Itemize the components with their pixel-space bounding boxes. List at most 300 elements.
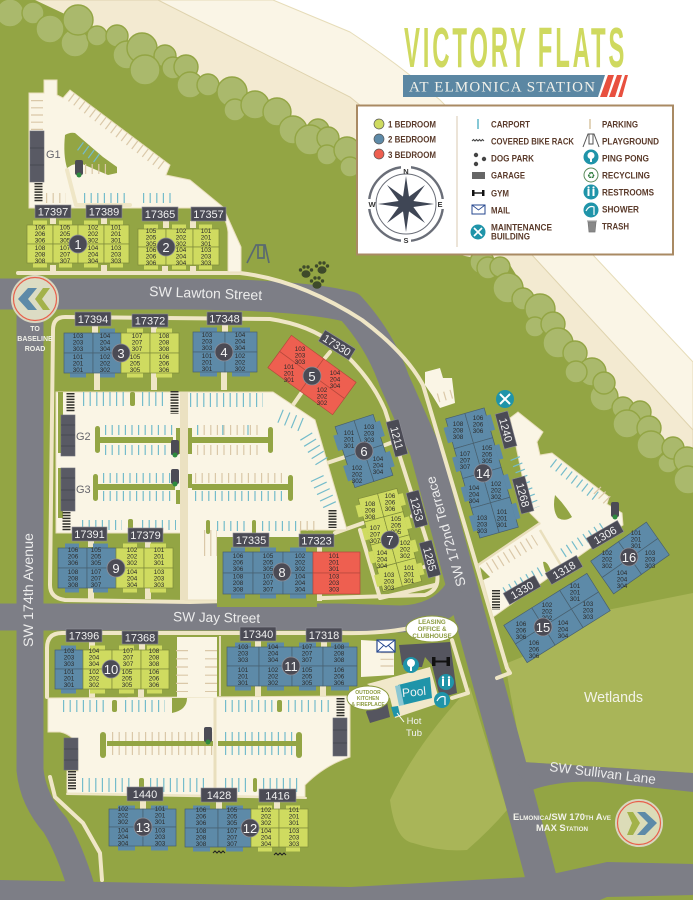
parking lot G1 [29, 80, 241, 272]
legend: compass rose [365, 163, 447, 245]
building 1: 202 [88, 231, 99, 238]
building 4: 301 [202, 366, 213, 373]
building 12: 201 [289, 814, 300, 820]
building 11: 201 [238, 674, 249, 680]
building 14: 201 [497, 516, 508, 522]
building 11: 105 [302, 667, 313, 674]
building 1: 102 [88, 224, 99, 232]
legend: icons column two: ♻ [587, 172, 595, 182]
wetlands label: Wetlands [584, 690, 643, 706]
building 16: 203 [645, 556, 656, 564]
building 7: 103 [384, 572, 395, 579]
legend: bedroom key: 2 BEDROOM [388, 134, 436, 146]
building 6: 6 [360, 444, 368, 459]
building 3: 107 [132, 333, 143, 340]
building 1: 1 [74, 237, 82, 252]
building 14: 205 [482, 452, 493, 458]
building 3: 101 [73, 354, 84, 361]
building 11 [227, 644, 357, 688]
building 15 [504, 573, 610, 663]
tree line [0, 0, 693, 494]
building 5: 203 [295, 352, 306, 360]
building 3: 205 [130, 360, 141, 368]
building 3: 307 [132, 346, 143, 353]
building 11: 301 [238, 680, 249, 687]
building 3: 305 [130, 367, 141, 374]
building 14: 208 [453, 428, 464, 434]
building 14: 106 [473, 415, 484, 422]
hot tub label: Hot [407, 716, 422, 727]
address tags horizontal: 17372 [135, 316, 165, 328]
building 2: 106 [146, 247, 157, 254]
building 7: 308 [365, 514, 376, 521]
building 8: 301 [329, 566, 340, 573]
building 10: 205 [122, 676, 133, 682]
building 15: 304 [558, 633, 569, 640]
legend: labels column one: GARAGE [491, 170, 525, 182]
building 12: 203 [289, 834, 300, 842]
legend: labels column two: PARKING [602, 120, 638, 130]
building 15: 201 [570, 590, 581, 596]
building 12: 306 [196, 820, 207, 827]
building 4: 4 [220, 345, 228, 360]
street label: SW 174th Avenue: SW 174th Avenue [21, 533, 36, 647]
building 14: 14 [476, 466, 490, 481]
building 3: 208 [159, 340, 170, 346]
building 10: 306 [149, 682, 160, 689]
legend: labels column two: RESTROOMS [602, 188, 654, 198]
building 14: 306 [473, 428, 484, 435]
building 1: 201 [111, 231, 122, 238]
building 9: 101 [154, 547, 165, 554]
building 2: 306 [146, 260, 157, 267]
building 4: 202 [235, 360, 246, 366]
building 6: 303 [364, 437, 375, 444]
building 1: 101 [111, 224, 122, 232]
building 11: 102 [268, 667, 279, 674]
building 2: 2 [162, 240, 170, 255]
building 7: 105 [391, 516, 402, 523]
building 16: 101 [631, 530, 642, 537]
building 2: 105 [146, 228, 157, 235]
building 11: 107 [302, 644, 313, 651]
building 9: 205 [91, 554, 102, 560]
legend: compass rose: E [437, 200, 443, 209]
building 14: 304 [469, 498, 480, 505]
building 7 [356, 488, 424, 592]
outdoor kitchen callout: KITCHEN [357, 696, 379, 702]
building 10: 106 [149, 669, 160, 676]
building 2: 305 [146, 241, 157, 248]
building 5: 101 [284, 364, 295, 371]
address tags rotated: 1330 [509, 580, 536, 602]
building 10: 10 [104, 662, 118, 677]
garage labels: G1 [46, 149, 61, 161]
building 14: 303 [477, 528, 488, 535]
legend: labels column two: TRASH [602, 222, 629, 232]
building 1: 208 [35, 252, 46, 258]
parking lot G2 G3 [56, 392, 347, 607]
building 9: 107 [91, 569, 102, 576]
building 2: 304 [176, 260, 187, 267]
building 7: 303 [384, 585, 395, 592]
building 12: 204 [261, 834, 272, 842]
address tags horizontal: 17318 [309, 630, 339, 642]
building 13: 103 [155, 828, 166, 834]
building walkway connectors [50, 218, 327, 809]
address tags horizontal: 17389 [89, 206, 119, 218]
building 3: 304 [100, 346, 111, 353]
building 14: 204 [469, 492, 480, 498]
building 7: 202 [400, 546, 411, 554]
building 7: 201 [404, 572, 415, 578]
building 4: 102 [235, 353, 246, 360]
building 2: 303 [201, 260, 212, 267]
parking lot east [478, 412, 623, 617]
building 10: 301 [64, 682, 75, 689]
address tags horizontal: 17357 [193, 209, 224, 221]
light green meadow [390, 687, 507, 850]
building 3: 102 [100, 354, 111, 361]
building 8: 202 [295, 560, 306, 566]
building 1: 206 [35, 231, 46, 238]
building 3: 207 [132, 340, 143, 346]
building 6: 104 [373, 456, 384, 463]
building 10: 302 [89, 682, 100, 689]
building 12: 206 [196, 814, 207, 820]
building 9: 106 [68, 547, 79, 554]
building 3: 302 [100, 367, 111, 374]
address tags horizontal: 17396 [69, 630, 99, 642]
building 2: 206 [146, 254, 157, 260]
building 2: 201 [201, 234, 212, 242]
building 15: 302 [542, 615, 553, 622]
building 9: 208 [68, 576, 79, 582]
building 8: 102 [295, 553, 306, 560]
building 8: 302 [295, 566, 306, 573]
building 14: 108 [453, 421, 464, 428]
badge: to Baseline Road [12, 276, 58, 322]
building 16: 304 [617, 583, 628, 590]
garage labels: G5 [316, 732, 331, 744]
building 4: 101 [202, 353, 213, 360]
legend: labels column one: MAIL [491, 206, 510, 216]
building 11: 304 [268, 657, 279, 664]
address tags horizontal: 17368 [125, 632, 155, 644]
building 15: 106 [529, 640, 540, 647]
building 12: 108 [196, 828, 207, 835]
building 11: 104 [268, 644, 279, 651]
building 8: 307 [263, 586, 274, 594]
building 9: 304 [127, 582, 138, 589]
roads [0, 294, 543, 890]
building 3: 108 [159, 333, 170, 340]
outdoor kitchen callout: OUTDOOR [355, 690, 381, 696]
building 8: 8 [278, 565, 286, 580]
building 10: 103 [64, 648, 75, 655]
building 16: 202 [602, 556, 613, 564]
building 16: 204 [617, 576, 628, 584]
leasing office callout: CLUBHOUSE [412, 633, 452, 640]
building 11: 101 [238, 667, 249, 674]
building 1: 207 [60, 252, 71, 258]
building 12: 207 [227, 834, 238, 842]
building 1: 203 [111, 252, 122, 258]
building 16: 104 [617, 570, 628, 577]
building 15: 101 [570, 583, 581, 590]
building 8: 103 [329, 574, 340, 580]
building 7: 104 [377, 550, 388, 557]
building 13: 303 [155, 840, 166, 848]
building 13: 204 [118, 834, 129, 841]
building 10: 201 [64, 676, 75, 682]
street label: SW Jay Street: SW Jay Street [173, 609, 260, 626]
building 11: 11 [284, 659, 298, 674]
building 5: 102 [317, 387, 328, 394]
building 9: 301 [154, 560, 165, 567]
building 14: 307 [460, 464, 471, 471]
building 2: 302 [176, 241, 187, 248]
building 12: 301 [289, 820, 300, 827]
building 10: 203 [64, 654, 75, 662]
building 7: 204 [377, 556, 388, 564]
subtitle banner: AT ELMONICA STATION [409, 80, 595, 96]
building 6: 103 [364, 424, 375, 431]
building 16: 301 [631, 543, 642, 550]
building 4: 203 [202, 338, 213, 346]
building 15: 102 [542, 602, 553, 609]
building 10: 104 [89, 648, 100, 655]
building 3: 202 [100, 360, 111, 368]
building 13: 201 [155, 812, 166, 820]
building 5: 103 [295, 346, 306, 353]
MAX station text: MAX Station [536, 823, 588, 833]
building 9: 305 [91, 560, 102, 567]
building 13: 101 [155, 806, 166, 813]
building 1: 301 [111, 238, 122, 244]
building 10: 108 [149, 648, 160, 655]
building 8: 101 [329, 553, 340, 560]
building 13: 304 [118, 840, 129, 848]
building 3: 204 [100, 340, 111, 346]
building 1: 105 [60, 224, 71, 232]
building 11: 208 [334, 650, 345, 658]
building 9: 203 [154, 576, 165, 582]
address tags horizontal: 17394 [78, 314, 108, 326]
building 10: 102 [89, 669, 100, 676]
building 14: 104 [469, 485, 480, 492]
building 2: 104 [176, 247, 187, 254]
building 8: 207 [263, 580, 274, 587]
building 7: 307 [370, 538, 381, 545]
building 6: 301 [344, 443, 355, 450]
legend: labels column one: GYM [491, 188, 509, 200]
building 12: 102 [261, 807, 272, 814]
building 14: 105 [482, 445, 493, 452]
building 9: 207 [91, 576, 102, 582]
building 8: 105 [263, 553, 274, 560]
address tags horizontal: 17397 [38, 206, 68, 218]
building 9: 104 [127, 569, 138, 576]
building 3: 105 [130, 354, 141, 361]
building 14: 101 [497, 509, 508, 516]
building 3: 104 [100, 333, 111, 340]
parking nub east of terrace [425, 368, 455, 408]
clubhouse and pool [361, 640, 468, 723]
building 10: 101 [64, 669, 75, 676]
building 13: 203 [155, 834, 166, 841]
building 15: 303 [583, 614, 594, 621]
building 7: 208 [365, 508, 376, 514]
building 1: 302 [88, 238, 99, 244]
bike racks north block [38, 183, 332, 531]
building 14: 203 [477, 522, 488, 528]
legend panel [357, 106, 673, 254]
address tags rotated [318, 330, 624, 605]
building 9: 302 [127, 560, 138, 567]
building 1: 106 [35, 224, 46, 232]
covered bike racks south [213, 851, 286, 855]
building 4: 204 [235, 338, 246, 346]
building 12: 12 [243, 821, 257, 836]
address tags horizontal: 17379 [130, 530, 161, 542]
building 5: 202 [317, 394, 328, 400]
building 9: 307 [91, 582, 102, 589]
building 12: 202 [261, 814, 272, 820]
street label: SW Lawton Street: SW Lawton Street [149, 283, 263, 303]
building 8: 305 [263, 566, 274, 573]
building 1: 107 [60, 245, 71, 252]
building 12 [185, 807, 308, 849]
building 8: 108 [233, 574, 244, 580]
building 6: 204 [373, 462, 384, 470]
legend: labels column two: PLAYGROUND [602, 136, 659, 148]
parking lot G4 G5 [48, 636, 350, 798]
building 3: 203 [73, 340, 84, 346]
building 11: 106 [334, 667, 345, 674]
icon: gym map [432, 657, 450, 666]
building 14: 202 [491, 488, 502, 494]
garage labels: G2 [76, 431, 91, 443]
building 12: 103 [289, 828, 300, 835]
building 7: 106 [385, 493, 396, 500]
building 15: 106 [516, 621, 527, 628]
building 1: 303 [111, 258, 122, 265]
building 8: 208 [233, 580, 244, 587]
address tags horizontal: 17365 [145, 209, 175, 221]
building 8: 205 [263, 560, 274, 566]
building 14: 102 [491, 481, 502, 488]
building 2: 203 [201, 254, 212, 260]
legend: labels column two: PING PONG [602, 154, 649, 164]
address tags horizontal: 1428 [207, 790, 231, 802]
garage labels [46, 149, 331, 761]
address tags horizontal: 1440 [133, 789, 157, 801]
building 8: 306 [233, 566, 244, 573]
building 8: 206 [233, 560, 244, 566]
building 7: 206 [385, 500, 396, 506]
building 3: 103 [73, 333, 84, 340]
icon: mail map [377, 640, 395, 652]
building 10: 303 [64, 661, 75, 668]
title: VICTORY FLATS [404, 16, 627, 80]
MAX station text: Elmonica/SW 170th Ave [513, 812, 611, 822]
legend: labels column one: COVERED BIKE RACK [491, 136, 574, 148]
building 13: 301 [155, 819, 166, 826]
building 3: 301 [73, 367, 84, 374]
building 12: 303 [289, 841, 300, 848]
building 4: 201 [202, 360, 213, 366]
hot tub label: Tub [406, 728, 422, 739]
building 6: 203 [364, 430, 375, 438]
sidewalks [18, 273, 510, 880]
legend: labels column one: BUILDING [491, 232, 530, 242]
building 16: 102 [602, 550, 613, 557]
building 7: 205 [391, 522, 402, 530]
building 3: 306 [159, 367, 170, 374]
building 9: 201 [154, 554, 165, 560]
to Baseline Road text: ROAD [25, 346, 45, 353]
building 16: 103 [645, 550, 656, 557]
icon: maintenance building [496, 390, 514, 408]
building 2: 102 [176, 228, 187, 235]
address tags rotated: 1211 [387, 425, 405, 451]
legend: bedroom key [374, 119, 436, 161]
leasing office callout [406, 616, 458, 642]
building 3: 206 [159, 360, 170, 368]
building 4: 103 [202, 332, 213, 339]
building 10: 305 [122, 682, 133, 689]
playground swing [247, 245, 269, 263]
building 12: 101 [289, 807, 300, 814]
building 9: 105 [91, 547, 102, 554]
charging stations [75, 160, 619, 744]
building 3: 308 [159, 346, 170, 353]
building 3 [64, 331, 179, 375]
building 8: 203 [329, 580, 340, 587]
dog park paws [299, 261, 329, 289]
building 1: 308 [35, 258, 46, 265]
garage labels: G3 [76, 484, 91, 496]
building 8: 106 [233, 553, 244, 560]
building 13: 102 [118, 806, 129, 813]
building 7: 7 [386, 533, 394, 548]
building 6: 302 [352, 478, 363, 485]
building 1: 103 [111, 245, 122, 252]
building 10: 107 [123, 648, 134, 655]
building 2: 301 [201, 241, 212, 248]
building 6: 201 [344, 436, 355, 444]
leasing office callout: OFFICE & [418, 626, 447, 633]
building 11: 303 [238, 657, 249, 664]
building 5: 301 [284, 377, 295, 384]
building 1: 205 [60, 231, 71, 238]
building 10: 202 [89, 676, 100, 682]
building 12: 305 [227, 820, 238, 827]
building 15: 306 [529, 653, 540, 660]
building 3: 106 [159, 354, 170, 361]
building 15: 203 [583, 608, 594, 614]
badge: MAX station [616, 800, 662, 846]
building 10: 304 [89, 661, 100, 668]
building 12: 208 [196, 834, 207, 842]
building 1 [27, 223, 129, 265]
legend: icons column two [583, 119, 599, 232]
address tags horizontal [35, 205, 342, 802]
building 12: 307 [227, 841, 238, 848]
building 7: 301 [404, 578, 415, 585]
building 11: 308 [334, 657, 345, 664]
